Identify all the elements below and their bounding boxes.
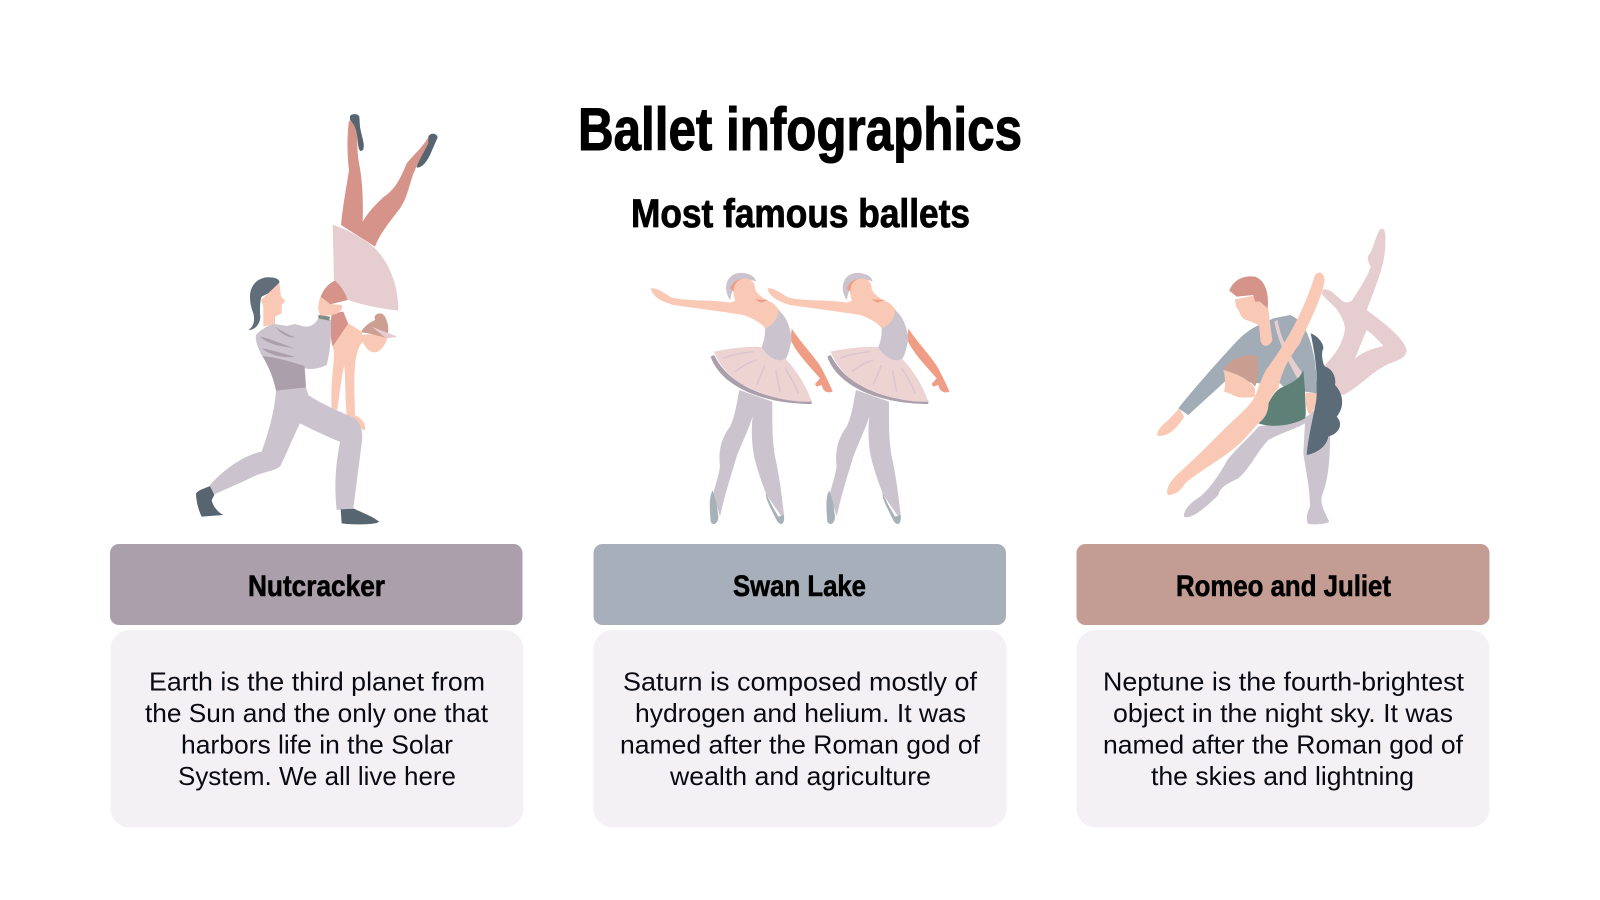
panel: Swan Lake [594, 544, 1006, 828]
text block: Swan Lake description [594, 630, 1006, 828]
text block: Swan Lake description: Saturn is composed mostly of [623, 666, 978, 696]
text block: Nutcracker description [110, 630, 524, 828]
header: Nutcracker: Nutcracker [248, 570, 385, 603]
text block: Romeo and Juliet description [1076, 630, 1490, 828]
text block: Romeo and Juliet description: named after the Roman god of [1103, 730, 1464, 760]
illustration: Swan Lake dancers [651, 273, 949, 524]
dancer one [651, 273, 833, 524]
title: Ballet infographics [578, 96, 1022, 163]
header: Romeo and Juliet: Romeo and Juliet [1176, 570, 1391, 603]
header: Romeo and Juliet [1076, 544, 1490, 625]
dancer two [767, 273, 949, 524]
text block: Romeo and Juliet description: object in the night sky. It was [1113, 698, 1453, 728]
illustration: Nutcracker dancers [196, 114, 438, 524]
text block: Nutcracker description: harbors life in the Solar [181, 730, 453, 760]
text block: Nutcracker description: Earth is the third planet from [149, 666, 485, 696]
text block: Swan Lake description: named after the Roman god of [620, 730, 981, 760]
text block: Romeo and Juliet description: Neptune is the fourth-brightest [1103, 666, 1465, 696]
illustration: Romeo and Juliet dancers [1157, 229, 1407, 524]
header: Nutcracker [110, 544, 522, 625]
header: Swan Lake [594, 544, 1006, 625]
text block: Nutcracker description: the Sun and the only one that [145, 698, 489, 728]
text block: Nutcracker description: System. We all live here [178, 761, 456, 791]
subtitle: Most famous ballets [631, 192, 970, 236]
panel: Nutcracker [110, 544, 524, 828]
header: Swan Lake: Swan Lake [733, 570, 866, 603]
text block: Swan Lake description: wealth and agriculture [669, 761, 931, 791]
text block: Romeo and Juliet description: the skies and lightning [1151, 761, 1414, 791]
text block: Swan Lake description: hydrogen and helium. It was [635, 698, 966, 728]
panel: Romeo and Juliet [1076, 544, 1490, 828]
